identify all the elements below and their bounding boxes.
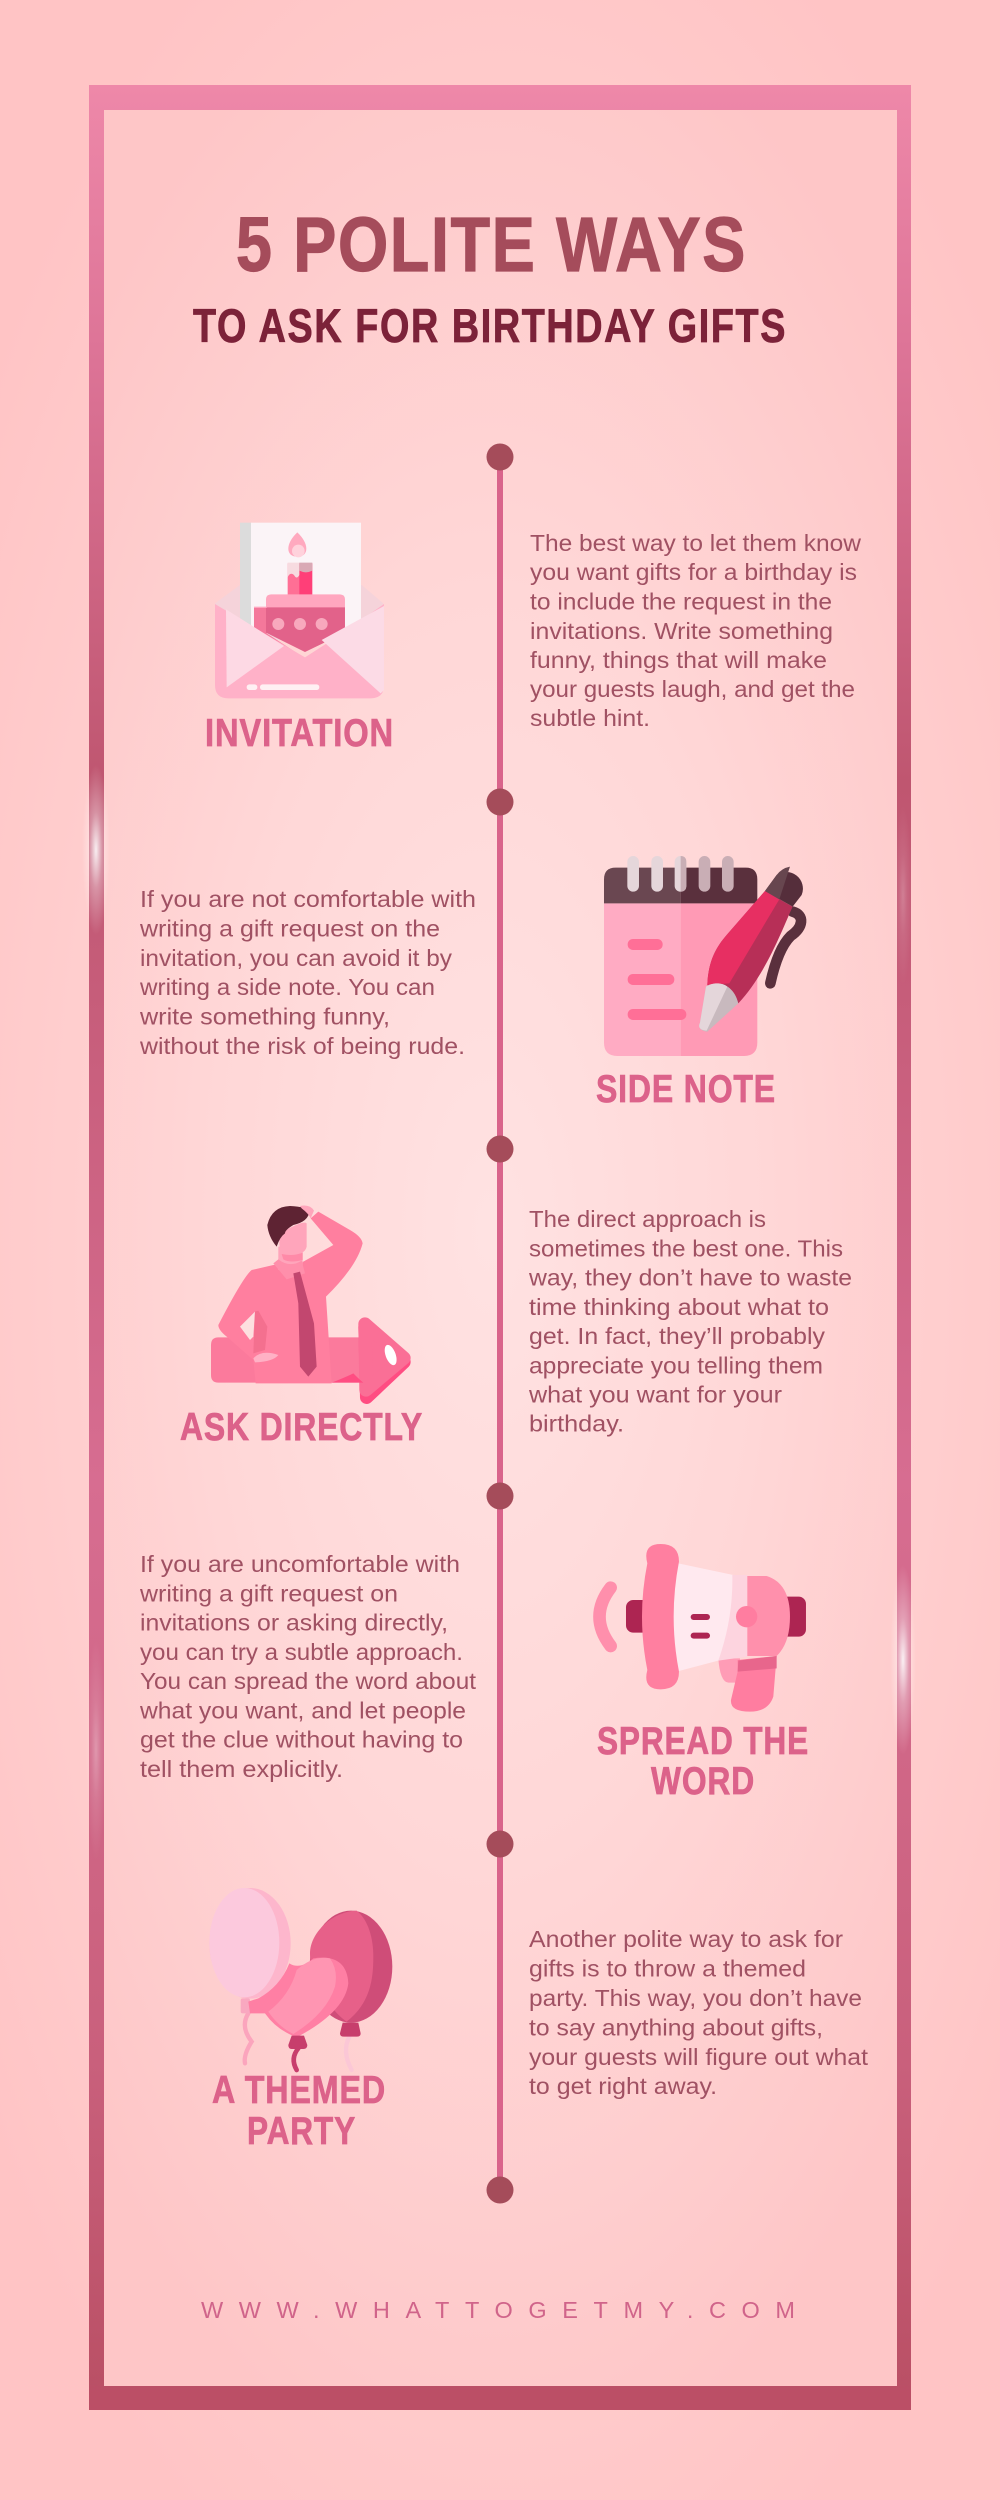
- text block: spread the word: [139, 1551, 477, 1782]
- text block: ask directly: get. In fact, they’ll probably: [529, 1323, 826, 1349]
- text block: invitation: funny, things that will make: [530, 647, 827, 673]
- icon: invitation envelope: [215, 523, 384, 698]
- text block: invitation: your guests laugh, and get the: [530, 676, 855, 702]
- text block: spread the word: what you want, and let people: [139, 1698, 466, 1724]
- footer website: WWW.WHATTOGETMY.COM: [201, 2297, 795, 2323]
- text block: spread the word: tell them explicitly.: [140, 1756, 343, 1782]
- text block: ask directly: appreciate you telling them: [529, 1352, 823, 1378]
- text block: side note: If you are not comfortable with: [140, 886, 476, 912]
- icon: megaphone: [599, 1544, 806, 1712]
- subtitle: TO ASK FOR BIRTHDAY GIFTS: [193, 299, 787, 352]
- icon: notepad and pen: [604, 856, 803, 1056]
- label: side note: SIDE NOTE: [596, 1068, 776, 1111]
- text block: invitation: The best way to let them know: [530, 530, 861, 556]
- text block: side note: without the risk of being rude.: [139, 1033, 465, 1059]
- text block: a themed party: to say anything about gifts,: [529, 2014, 823, 2040]
- text block: ask directly: what you want for your: [528, 1382, 782, 1408]
- text block: ask directly: time thinking about what to: [529, 1294, 829, 1320]
- text block: spread the word: If you are uncomfortable with: [140, 1551, 460, 1577]
- label: spread the word: WORD: [651, 1760, 755, 1803]
- label: spread the word: [597, 1720, 809, 1803]
- text block: a themed party: [529, 1926, 869, 2099]
- text block: a themed party: party. This way, you don’t have: [529, 1985, 862, 2011]
- text block: invitation: invitations. Write something: [530, 618, 833, 644]
- icon: balloons: [209, 1888, 392, 2070]
- text block: invitation: [530, 530, 861, 731]
- label: a themed party: PARTY: [247, 2110, 356, 2153]
- text block: spread the word: you can try a subtle approach.: [140, 1639, 463, 1665]
- text block: ask directly: [528, 1206, 852, 1436]
- label: a themed party: A THEMED: [212, 2069, 386, 2112]
- text block: ask directly: sometimes the best one. This: [529, 1236, 843, 1262]
- text block: ask directly: birthday.: [529, 1410, 624, 1436]
- text block: spread the word: invitations or asking directly,: [140, 1610, 448, 1636]
- label: invitation: INVITATION: [205, 712, 394, 755]
- label: ask directly: ASK DIRECTLY: [180, 1406, 423, 1449]
- text block: a themed party: your guests will figure out what: [529, 2044, 869, 2070]
- text block: spread the word: You can spread the word about: [140, 1668, 477, 1694]
- label: spread the word: SPREAD THE: [597, 1720, 809, 1763]
- timeline: [486, 444, 514, 2204]
- text block: a themed party: Another polite way to ask for: [529, 1926, 843, 1952]
- label: a themed party: [212, 2069, 386, 2153]
- text block: side note: [139, 886, 476, 1059]
- title: 5 POLITE WAYS: [236, 202, 747, 288]
- text block: side note: writing a side note. You can: [139, 974, 435, 1000]
- icon: person and arrow: [211, 1206, 404, 1397]
- text block: a themed party: gifts is to throw a themed: [529, 1956, 806, 1982]
- text block: ask directly: The direct approach is: [529, 1206, 766, 1232]
- text block: side note: writing a gift request on the: [139, 916, 440, 942]
- text block: spread the word: writing a gift request on: [139, 1580, 398, 1606]
- text block: invitation: to include the request in the: [530, 588, 832, 614]
- frame border: [82, 85, 916, 2410]
- text block: spread the word: get the clue without having to: [140, 1726, 463, 1752]
- text block: a themed party: to get right away.: [529, 2073, 717, 2099]
- text block: invitation: you want gifts for a birthday is: [530, 559, 857, 585]
- text block: ask directly: way, they don’t have to waste: [528, 1264, 852, 1290]
- text block: side note: invitation, you can avoid it by: [140, 945, 453, 971]
- text block: invitation: subtle hint.: [530, 705, 650, 731]
- text block: side note: write something funny,: [139, 1004, 390, 1030]
